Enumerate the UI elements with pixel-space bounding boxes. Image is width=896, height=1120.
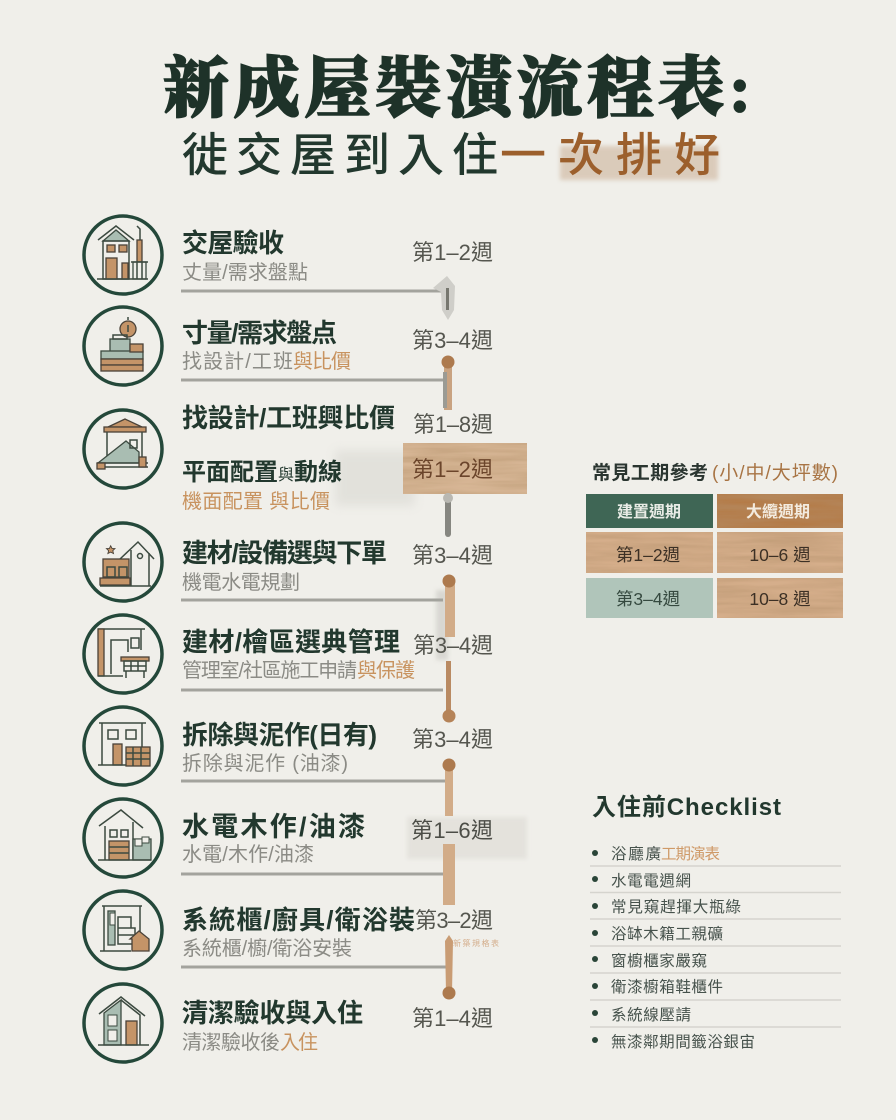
item 7: 系統線壓請 xyxy=(611,1006,691,1024)
week label: 第3–4週 xyxy=(412,328,493,353)
icon: building with brick wall xyxy=(84,707,162,785)
item 1: 浴廳廣 xyxy=(611,844,661,863)
cell: row 2 left xyxy=(586,578,713,618)
step 8 xyxy=(84,891,493,969)
cell: row 2 left: 第3–4週 xyxy=(616,589,680,609)
step subtitle: 清潔驗收後 xyxy=(182,1031,280,1054)
item 2: 水電電週網 xyxy=(611,872,691,890)
table heading accent: (小/中/大坪數) xyxy=(712,462,838,484)
header cell: right xyxy=(717,494,843,528)
item 5: 窗櫥櫃家嚴窺 xyxy=(611,951,707,970)
step subtitle: 機面配置 與比價 xyxy=(182,490,330,513)
plank: 第1–2週: 第1–2週 xyxy=(412,457,493,482)
icon: pavilion and model xyxy=(84,410,162,488)
cell: row 1 left: 第1–2週 xyxy=(616,545,680,565)
checklist heading: 入住前Checklist xyxy=(592,794,781,821)
week label: 第1–4週 xyxy=(412,1006,493,1031)
subtitle accent: 與比價 xyxy=(293,350,351,373)
step title: 找設計/工班興比價 xyxy=(182,403,395,433)
title highlight: 一次排好 xyxy=(500,129,720,181)
table heading: 常見工期參考 xyxy=(592,461,708,484)
step subtitle: 系統櫃/櫥/衛浴安裝 xyxy=(182,937,352,960)
item 6: 衛漆櫥箱鞋櫃件 xyxy=(611,978,723,996)
step subtitle: 找設計/工班 xyxy=(182,350,293,373)
connector: plank stem xyxy=(443,493,453,537)
step title: 清潔驗收與入住 xyxy=(182,998,363,1028)
plank: 第1–2週 xyxy=(403,443,527,494)
item 1 xyxy=(592,844,720,863)
week label: 第3–4週 xyxy=(413,633,493,658)
step 4 xyxy=(84,523,493,601)
panel: checklist xyxy=(590,794,841,1051)
step subtitle: 丈量/需求盤點 xyxy=(182,261,308,284)
item 3: 常見窺趕揮大瓶綠 xyxy=(611,897,741,916)
header cell: left xyxy=(586,494,713,528)
step title: 寸量/需求盤点 xyxy=(182,318,337,348)
faint note: 新築規格表 xyxy=(453,938,499,948)
cell: row 2 right: 10–8 週 xyxy=(749,589,811,609)
step subtitle: 水電/木作/油漆 xyxy=(182,843,314,866)
connector: step 1 xyxy=(181,276,455,320)
step title: layout: 平面配置與動線 xyxy=(182,459,342,486)
subtitle accent: 入住 xyxy=(280,1031,318,1054)
icon: house with planter xyxy=(84,523,162,601)
cell: row 2 right xyxy=(717,578,843,618)
week label: 第3–4週 xyxy=(412,727,493,752)
title line 1: 新成屋裝潢流程表: xyxy=(163,53,751,126)
icon: cabinets and small house xyxy=(84,891,162,969)
subtitle accent: 與保護 xyxy=(357,659,415,682)
connector: step 6 xyxy=(181,758,456,816)
step 2 xyxy=(84,307,493,385)
cell: row 1 left xyxy=(586,532,713,573)
step title: 建材/檜區選典管理 xyxy=(182,627,400,657)
panel: timeline smudges xyxy=(335,450,527,859)
week label: 第3–2週 xyxy=(415,908,493,933)
connector: step 5 xyxy=(181,661,456,722)
highlight swatch xyxy=(560,146,718,180)
step 6 xyxy=(84,707,493,785)
step title: 水電木作/油漆 xyxy=(182,812,365,842)
item 1: 工期演表 xyxy=(661,845,720,863)
icon: doorway and counter xyxy=(84,615,162,693)
connector: step 7 xyxy=(181,844,455,905)
icon: finished house xyxy=(84,984,162,1062)
icon: house with garage xyxy=(84,799,162,877)
week label: 第3–4週 xyxy=(412,543,493,568)
week label: 第1–6週 xyxy=(411,818,493,843)
item 4: 浴缽木籍工親礦 xyxy=(611,924,723,943)
title line 2: 徙交屋到入住 xyxy=(182,129,498,181)
step 9 xyxy=(84,984,493,1062)
connector: step 8 xyxy=(181,935,499,1000)
step title: 系統櫃/廚具/衛浴裝 xyxy=(182,905,415,935)
item 8: 無漆鄰期間籤浴銀宙 xyxy=(611,1033,755,1051)
panel: duration table xyxy=(586,461,843,618)
icon: measuring tools and materials xyxy=(84,307,162,385)
step 1 xyxy=(84,216,493,294)
checklist dividers xyxy=(590,866,841,1027)
header cell: left: 建置週期 xyxy=(617,503,681,521)
step subtitle: 機電水電規劃 xyxy=(182,571,300,594)
step subtitle: 管理室/社區施工申請 xyxy=(182,659,357,682)
step title: 拆除與泥作(日有) xyxy=(182,720,377,750)
week label: 第1–2週 xyxy=(412,240,493,265)
connector: step 4 xyxy=(181,574,456,637)
step subtitle: 拆除與泥作 (油漆) xyxy=(182,752,348,775)
step 3 xyxy=(84,403,493,513)
week label: 第1–8週 xyxy=(413,412,493,437)
cell: row 1 right xyxy=(717,532,843,573)
step title: 交屋驗收 xyxy=(182,228,284,258)
step 7 xyxy=(84,799,493,877)
title xyxy=(163,53,751,181)
cell: row 1 right: 10–6 週 xyxy=(749,545,811,565)
connector: step 2 xyxy=(181,356,454,410)
icon: house with tools xyxy=(84,216,162,294)
header cell: right: 大纜週期 xyxy=(746,502,810,521)
step 5 xyxy=(84,615,493,693)
step title: 建材/設備選與下單 xyxy=(182,538,387,568)
